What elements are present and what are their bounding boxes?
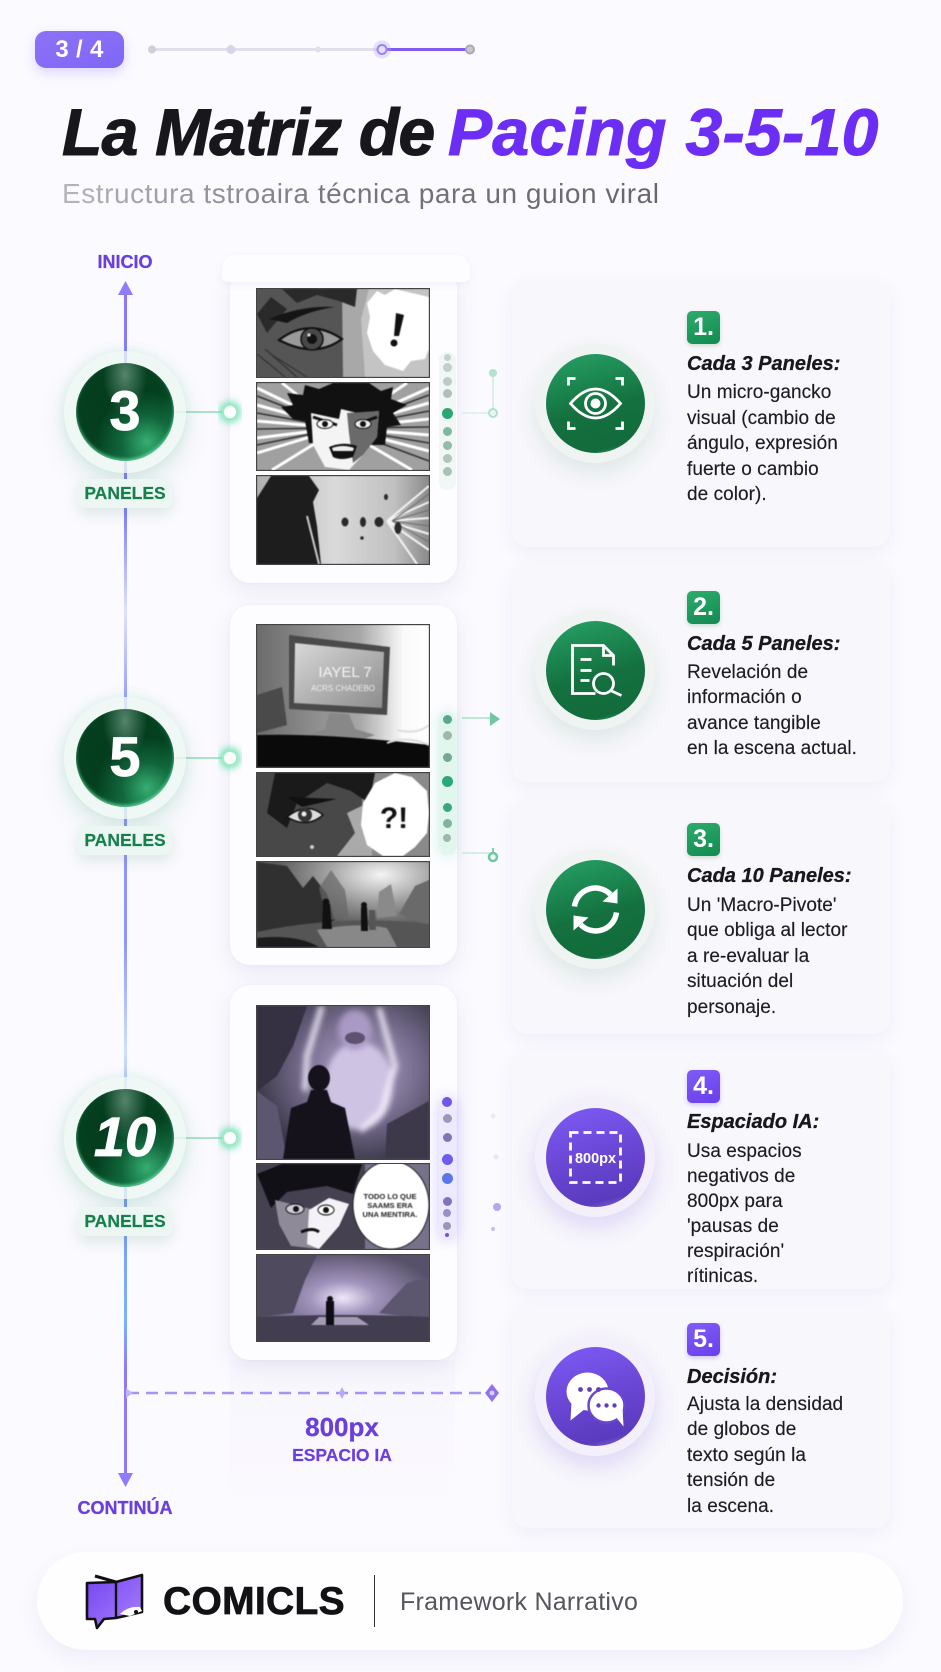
body text: que obliga al lector (687, 920, 848, 941)
icon: refresh (535, 849, 655, 969)
number: 5 (109, 725, 141, 788)
heading: Espaciado IA: (687, 1111, 819, 1133)
body text: 'pausas de (687, 1216, 779, 1236)
caption: ESPACIO IA (292, 1445, 392, 1465)
body text: Un 'Macro-Pivote' (687, 895, 837, 916)
number: 3 (109, 379, 141, 442)
tag: paneles 3: PANELES (84, 483, 166, 503)
body text: fuerte o cambio (687, 459, 819, 480)
dashed measure line (126, 1384, 499, 1402)
manga panel: ruins (257, 862, 429, 947)
body text (687, 1140, 802, 1286)
manga panel: surprise: ?! (380, 802, 408, 835)
title: La Matriz de Pacing 3-5-10 (62, 95, 879, 169)
manga panel: monitor (257, 625, 429, 767)
body text: texto según la (687, 1445, 806, 1466)
faint spacer panel (230, 1360, 455, 1525)
tagline: Framework Narrativo (400, 1588, 638, 1616)
body text: Un micro-gancko (687, 382, 831, 403)
body text: visual (cambio de (687, 408, 836, 429)
logo icon: book (86, 1574, 144, 1630)
body text (687, 662, 857, 759)
body text (687, 382, 838, 505)
icon: document search (535, 610, 655, 730)
rail: strip 3 dots (438, 352, 456, 490)
card 2 (512, 565, 890, 782)
sphere (76, 363, 174, 461)
tag: paneles 10 (78, 1207, 172, 1236)
rail: strip 5 dots (438, 712, 456, 855)
connector: strip 5 right (462, 712, 500, 862)
icon: chat bubbles (535, 1336, 655, 1456)
sphere (76, 1089, 174, 1187)
body text: tensión de (687, 1470, 775, 1491)
badge: 2. (693, 593, 714, 621)
label: continua: CONTINÚA (78, 1498, 172, 1518)
progress track (148, 40, 475, 58)
measure label (292, 1412, 392, 1465)
rail: strip 10 dots (438, 1098, 456, 1240)
heading: Cada 10 Paneles: (687, 865, 852, 887)
manga panel: shout (257, 383, 429, 470)
badge (687, 591, 720, 624)
body text: situación del (687, 971, 793, 992)
body text: personaje. (687, 997, 776, 1018)
tag: paneles 5 (78, 826, 172, 855)
manga panel: the lie: UNA MENTIRA. (363, 1210, 417, 1219)
number: 10 (94, 1105, 156, 1168)
badge: 5. (693, 1325, 714, 1353)
timeline axis with arrows (118, 281, 133, 1487)
card 5 (512, 1307, 890, 1528)
panel: strip 5 (230, 605, 457, 965)
marks: faint purple connector (490, 1114, 501, 1231)
manga panel: lone figure (257, 1255, 429, 1341)
manga panel: the lie (257, 1164, 429, 1249)
manga panel: surprise (257, 773, 429, 856)
body text: información o (687, 687, 802, 708)
connector: strip 3 right (462, 369, 498, 418)
icon: 800px (535, 1097, 655, 1217)
badge: 4. (693, 1072, 714, 1100)
badge (687, 311, 720, 344)
icon: eye (535, 343, 655, 463)
node: 3 panels (64, 351, 186, 473)
body text: respiración' (687, 1240, 784, 1262)
heading: Cada 5 Paneles: (687, 633, 840, 655)
body text: avance tangible (687, 713, 821, 734)
tag: paneles 10: PANELES (84, 1211, 166, 1231)
panel: strip 3 top cap (222, 255, 470, 282)
manga panel: eye (257, 289, 429, 377)
badge (687, 1323, 720, 1356)
panel: strip 3 (230, 268, 457, 583)
footer (37, 1552, 903, 1650)
label: inicio: INICIO (97, 252, 152, 272)
manga panel: apparition (257, 1006, 429, 1159)
card 4 (512, 1052, 890, 1289)
tag: paneles 3 (78, 479, 172, 508)
card 1 (512, 281, 890, 547)
heading: Cada 3 Paneles: (687, 353, 840, 375)
card 3 (512, 800, 890, 1034)
badge (687, 1070, 720, 1103)
icon: 800px: 800px (574, 1150, 616, 1166)
progress badge: 3 / 4 (55, 36, 104, 63)
manga panel: monitor: ACRS CHADEBO (311, 684, 375, 693)
divider (374, 1575, 375, 1627)
body text: Usa espacios (687, 1140, 802, 1162)
panel: strip 10 (230, 985, 457, 1360)
node: 10 panels (64, 1077, 186, 1199)
body text: Revelación de (687, 662, 808, 683)
progress badge (35, 31, 124, 68)
value: 800px (305, 1412, 379, 1442)
body text: de color). (687, 484, 767, 505)
body text: a re-evaluar la (687, 946, 809, 967)
body text: en la escena actual. (687, 738, 857, 759)
body text: Ajusta la densidad (687, 1394, 843, 1415)
body text: ángulo, expresión (687, 433, 838, 454)
manga panel: the lie: SAAMS ERA (367, 1201, 413, 1210)
badge (687, 823, 720, 856)
sphere (76, 709, 174, 807)
tag: paneles 5: PANELES (84, 830, 166, 850)
wordmark: COMICLS (163, 1580, 345, 1623)
body text: de globos de (687, 1419, 796, 1440)
body text (687, 895, 848, 1018)
badge: 3. (693, 825, 714, 853)
body text: negativos de (687, 1166, 795, 1186)
manga panel: monitor: IAYEL 7 (318, 664, 372, 681)
body text: la escena. (687, 1496, 774, 1517)
heading: Decisión: (687, 1366, 777, 1388)
body text: 800px para (687, 1190, 783, 1212)
connectors: spheres to strips (174, 396, 242, 1154)
manga panel: the lie: TODO LO QUE (363, 1192, 417, 1201)
manga panel: blast (257, 476, 429, 564)
body text (687, 1394, 843, 1517)
badge: 1. (693, 313, 714, 341)
subtitle: Estructura tstroaira técnica para un guion viral (62, 178, 660, 209)
node: 5 panels (64, 697, 186, 819)
body text: rítinicas. (687, 1266, 758, 1286)
